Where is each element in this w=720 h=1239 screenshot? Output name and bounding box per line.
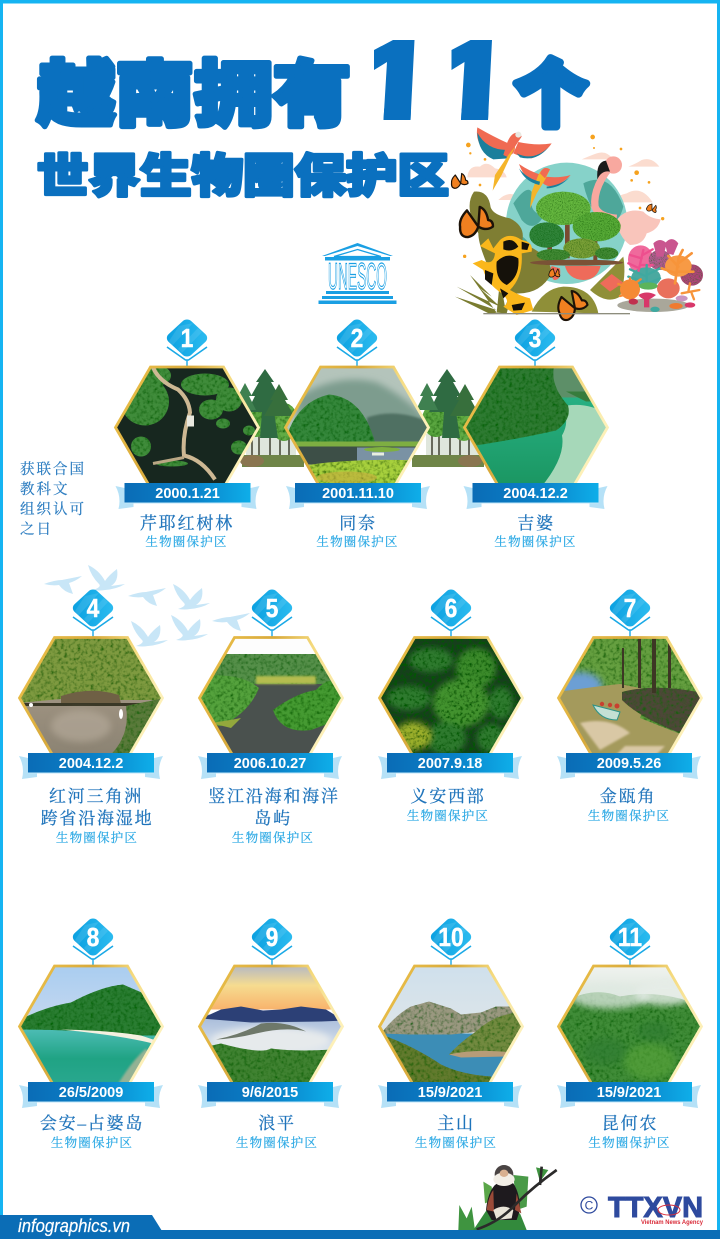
badge 4: 4: [87, 595, 100, 623]
title line 1: 个: [515, 56, 587, 136]
title line 1: [34, 40, 590, 130]
tree group: [529, 192, 621, 262]
panel: site 4: [18, 587, 164, 845]
site 10 name: 主山: [437, 1114, 475, 1133]
site 1 subtitle: 生物圈保护区: [145, 534, 228, 549]
site 6 name: 义安西部: [410, 787, 486, 806]
monkey body: [486, 1165, 521, 1220]
panel: site 9: [198, 916, 344, 1150]
site 6 subtitle: 生物圈保护区: [407, 808, 489, 823]
date ribbon 8: [19, 1082, 163, 1108]
date ribbon 3: 2004.12.2: [503, 486, 568, 502]
site 11 subtitle: 生物圈保护区: [588, 1135, 671, 1150]
date ribbon 11: 15/9/2021: [597, 1085, 661, 1101]
site 2 name: 同奈: [339, 514, 377, 533]
badge 6: [428, 587, 474, 637]
site 5 name: 岛屿: [254, 809, 292, 828]
date ribbon 4: [19, 753, 163, 779]
ground line: [483, 313, 630, 314]
photo: Kon Ha Nung: [557, 966, 703, 1088]
copyright symbol: [581, 1197, 597, 1213]
globe: [506, 163, 627, 284]
date ribbon 1: 2000.1.21: [155, 486, 220, 502]
photo: Lang Biang: [198, 966, 344, 1088]
site 5 name: 竖江沿海和海洋: [208, 786, 340, 806]
side note: date of UNESCO recognition: [20, 460, 86, 538]
panel: site 5: [198, 587, 344, 845]
branch: [477, 1167, 557, 1229]
frog: [473, 236, 533, 315]
date ribbon 10: 15/9/2021: [418, 1085, 482, 1101]
panel: site 3: [463, 317, 609, 549]
badge 2: [334, 317, 380, 367]
badge 7: [607, 587, 653, 637]
coral: [617, 239, 703, 312]
olive leaves: [470, 192, 624, 313]
tree ground: [530, 260, 623, 266]
date ribbon 11: [557, 1082, 701, 1108]
badge 3: 3: [529, 325, 541, 353]
date ribbon 7: 2009.5.26: [597, 756, 661, 772]
badge 8: [70, 916, 116, 966]
site 4 name: 红河三角洲: [49, 787, 143, 806]
site 4 name: [41, 787, 153, 828]
panel: site 11: [557, 916, 703, 1150]
site 1 name: 芹耶红树林: [140, 514, 234, 533]
site 8 subtitle: 生物圈保护区: [51, 1135, 133, 1150]
illustration: douc langur on branch: [458, 1165, 557, 1230]
badge 8: 8: [87, 924, 99, 952]
photo: Can Gio mangrove: [114, 366, 260, 488]
photo: Cat Ba: [463, 366, 609, 490]
site 7 subtitle: 生物圈保护区: [588, 808, 670, 823]
badge 1: [164, 317, 210, 367]
icon: UNESCO temple logo: [318, 243, 396, 304]
side note: date of UNESCO recognition: 组织认可: [20, 501, 86, 518]
site 5 name: [208, 786, 340, 828]
parrot large: [477, 127, 552, 191]
site 10 subtitle: 生物圈保护区: [415, 1135, 497, 1150]
side note: date of UNESCO recognition: 教科文: [20, 481, 70, 498]
site 8 name: 会安–占婆岛: [40, 1114, 144, 1133]
photo: Western Nghe An: [378, 637, 524, 759]
site 5 subtitle: 生物圈保护区: [232, 830, 314, 845]
badge 5: [249, 587, 295, 637]
side note: date of UNESCO recognition: 获联合国: [20, 460, 86, 478]
date ribbon 9: 9/6/2015: [242, 1085, 298, 1101]
clouds: [467, 152, 659, 202]
badge 6: 6: [445, 595, 457, 623]
photo: Ca Mau cape: [557, 637, 703, 759]
site 7 name: 金瓯角: [600, 787, 656, 806]
site 2 subtitle: 生物圈保护区: [316, 534, 399, 549]
site 3 subtitle: 生物圈保护区: [494, 534, 577, 549]
title line 1: 越南拥有: [37, 56, 351, 136]
flamingo: [595, 156, 661, 245]
badge 7: 7: [624, 595, 636, 623]
spiky plant: [455, 275, 515, 314]
date ribbon 9: [198, 1082, 342, 1108]
badge 4: [70, 587, 116, 637]
jungle leaves: [458, 1167, 548, 1230]
badge 9: [249, 916, 295, 966]
date ribbon 6: 2007.9.18: [418, 756, 482, 772]
text: UNESCO: [328, 256, 387, 297]
photo: Hoi An Cham Islands: [18, 966, 164, 1088]
date ribbon 7: [557, 753, 701, 779]
panel: site 7: [557, 587, 703, 823]
date ribbon 2: [286, 483, 430, 509]
date ribbon 2: 2001.11.10: [322, 486, 394, 502]
date ribbon 5: [198, 753, 342, 779]
badge 9: 9: [266, 924, 278, 952]
parrot small: [519, 164, 571, 208]
date ribbon 4: 2004.12.2: [59, 756, 123, 772]
panel: site 6: [378, 587, 524, 823]
forest backdrop: trees between sites 1 and 2: [234, 369, 304, 467]
date ribbon 1: [116, 483, 260, 509]
site 9 subtitle: 生物圈保护区: [236, 1135, 318, 1150]
title: [34, 40, 590, 198]
site 3 name: 吉婆: [517, 514, 555, 533]
badge 5: 5: [266, 595, 278, 623]
title line 1: 11: [364, 19, 504, 144]
date ribbon 6: [378, 753, 522, 779]
site 11 name: 昆何农: [602, 1114, 658, 1133]
site 4 subtitle: 生物圈保护区: [56, 830, 138, 845]
butterflies: [450, 173, 659, 322]
panel: site 1: [114, 317, 260, 549]
photo: Chua Mountain: [378, 966, 524, 1088]
site 9 name: 浪平: [258, 1114, 296, 1133]
TTXVN logo: Vietnam News Agency: [641, 1219, 703, 1226]
panel: site 10: [378, 916, 524, 1150]
illustration: biodiversity collage: [450, 127, 703, 322]
badge 11: 11: [618, 924, 642, 952]
date ribbon 10: [378, 1082, 522, 1108]
panel: site 8: [18, 916, 164, 1150]
photo: Red River Delta: [18, 637, 164, 759]
birds: [44, 565, 250, 646]
badge 11: [607, 916, 653, 966]
site 4 name: 跨省沿海湿地: [41, 809, 153, 828]
side note: date of UNESCO recognition: 之日: [20, 521, 53, 538]
copyright symbol: C: [585, 1198, 594, 1212]
badge 1: 1: [181, 325, 193, 353]
photo: Kien Giang: [198, 637, 344, 759]
anthurium flowers: [550, 266, 623, 292]
badge 10: 10: [438, 924, 464, 952]
photo: Dong Nai: [284, 366, 430, 488]
badge 2: 2: [351, 325, 363, 353]
date ribbon 5: 2006.10.27: [234, 756, 306, 772]
badge 10: [428, 916, 474, 966]
footer site name: infographics.vn: [18, 1215, 130, 1236]
TTXVN logo: TTXVN: [608, 1192, 703, 1224]
date ribbon 8: 26/5/2009: [59, 1085, 123, 1101]
forest backdrop: trees between sites 2 and 3: [412, 369, 484, 467]
dots: [463, 135, 664, 258]
title line 2: 世界生物圈保护区: [37, 150, 449, 202]
panel: site 2: [284, 317, 430, 549]
date ribbon 3: [464, 483, 608, 509]
badge 3: [512, 317, 558, 367]
footer bar: [0, 1215, 720, 1239]
